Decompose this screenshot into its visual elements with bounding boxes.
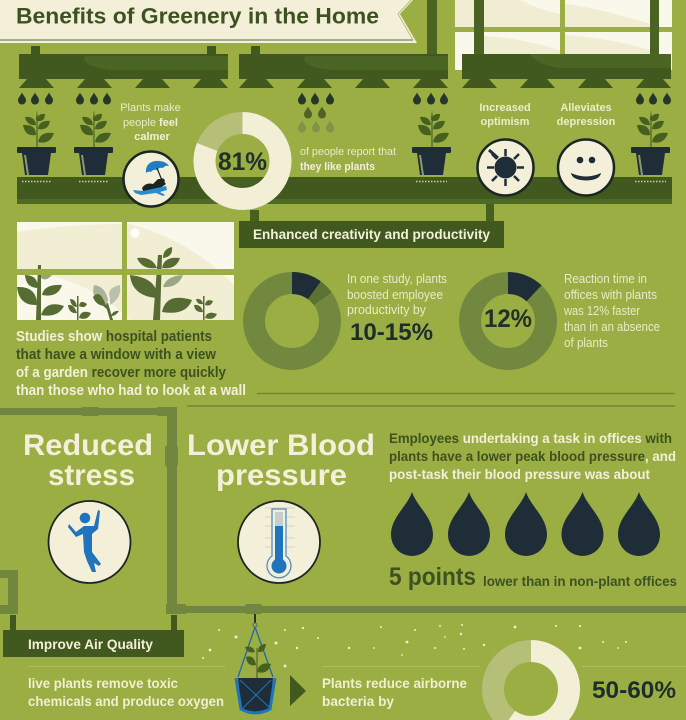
text: live plants remove toxic chemicals xyxy=(28,675,224,709)
value: 12%: 12% xyxy=(484,305,532,333)
text: people like plants: of people report that xyxy=(300,146,396,158)
heading: lower blood pressure: Lower Blood xyxy=(187,429,375,462)
text: plants reduce airborne bacteria: Plants reduce airborne xyxy=(322,675,467,691)
plant: small centre xyxy=(68,296,91,320)
donut: productivity xyxy=(254,283,330,359)
icon: thermometer xyxy=(238,501,320,583)
text: people like plants xyxy=(300,146,396,173)
label: increased optimism: optimism xyxy=(481,116,530,128)
icon: relaxed person xyxy=(48,501,130,583)
donut: 81 percent xyxy=(204,123,280,199)
text: live plants remove toxic chemicals: live plants remove toxic xyxy=(28,675,178,691)
text: plants reduce airborne bacteria xyxy=(322,675,467,709)
shelf xyxy=(17,177,672,204)
connector pipes xyxy=(250,204,494,222)
title banner xyxy=(0,0,417,43)
text: reaction time xyxy=(563,272,660,350)
text: productivity study xyxy=(347,272,447,346)
label: alleviates depression: depression xyxy=(557,116,616,128)
heading: improve air quality: Improve Air Quality xyxy=(28,637,153,652)
label: increased optimism: Increased xyxy=(479,102,531,114)
text: plants make people feel calmer: calmer xyxy=(134,131,170,143)
text: reaction time: of plants xyxy=(564,336,608,350)
icon: sun xyxy=(478,140,534,196)
garden window view xyxy=(17,222,234,320)
heading: enhanced creativity and productivity: Enhanced creativity and productivity xyxy=(253,226,490,242)
value: 10-15%: 10-15% xyxy=(350,319,433,346)
plant: grey leaves xyxy=(93,285,120,320)
donut: bacteria reduction xyxy=(493,651,569,720)
text: 5 points lower: lower than in non-plant offices xyxy=(483,574,677,589)
plant pot 4 xyxy=(631,110,670,175)
text: hospital patients study: Studies show hospital patients xyxy=(16,328,212,345)
plant pot 2 xyxy=(74,110,113,175)
text: productivity study: productivity by xyxy=(347,303,427,317)
heading: reduced stress: Reduced xyxy=(23,429,153,462)
text: reaction time: than in an absence xyxy=(564,320,660,334)
text: 5 points lower: 5 points xyxy=(389,563,476,591)
text: plants make people feel calmer: Plants make xyxy=(120,102,181,114)
text: live plants remove toxic chemicals: chemicals and produce oxygen xyxy=(28,693,224,709)
text: people like plants: they like plants xyxy=(300,161,375,173)
text: 5 points lower xyxy=(389,563,677,591)
text: productivity study: boosted employee xyxy=(347,288,443,302)
heading: enhanced creativity and productivity xyxy=(239,221,504,248)
text: productivity study: In one study, plants xyxy=(347,272,447,286)
plant: right large xyxy=(130,247,192,320)
plant pot 1 xyxy=(17,110,56,175)
plant: left large xyxy=(17,265,64,320)
label: alleviates depression: Alleviates xyxy=(560,102,612,114)
value: 81% xyxy=(218,148,267,176)
icon: hanging plant basket xyxy=(236,614,275,713)
text: employees blood pressure: plants have a lower peak blood pressure, and xyxy=(389,449,676,464)
text: reaction time: Reaction time in xyxy=(564,272,647,286)
donut: reaction time xyxy=(470,283,546,359)
icon: smiley face xyxy=(558,140,614,196)
five blood drops xyxy=(391,492,660,556)
text: reaction time: was 12% faster xyxy=(563,304,640,318)
plant: small right xyxy=(194,296,217,320)
water pipes xyxy=(19,0,671,88)
heading: lower blood pressure: pressure xyxy=(216,459,347,492)
water drops xyxy=(18,92,671,132)
text: hospital patients study xyxy=(16,328,246,399)
frame pipes xyxy=(0,407,686,631)
floating air particles xyxy=(202,624,627,667)
arrow xyxy=(290,675,306,706)
text: employees blood pressure: post-task their blood pressure was about xyxy=(389,467,650,482)
heading: reduced stress: stress xyxy=(48,459,135,492)
text: employees blood pressure: Employees undertaking a task in offices with xyxy=(389,431,672,446)
icon: relaxing on sun lounger xyxy=(124,152,178,206)
window: top right xyxy=(455,0,672,70)
text: employees blood pressure xyxy=(389,431,676,482)
text: hospital patients study: than those who had to look at a wall xyxy=(16,382,246,399)
text: plants make people feel calmer: people feel xyxy=(123,117,178,129)
text: plants reduce airborne bacteria: bacteria by xyxy=(322,693,394,709)
text: hospital patients study: of a garden recover more quickly xyxy=(16,364,227,381)
heading: improve air quality xyxy=(3,630,184,657)
plant pot 3 xyxy=(412,110,451,175)
text: hospital patients study: that have a window with a view xyxy=(16,346,216,363)
text: reaction time: offices with plants xyxy=(564,288,657,302)
value: 50-60%: 50-60% xyxy=(592,677,676,704)
title: Benefits of Greenery in the Home xyxy=(16,4,379,28)
